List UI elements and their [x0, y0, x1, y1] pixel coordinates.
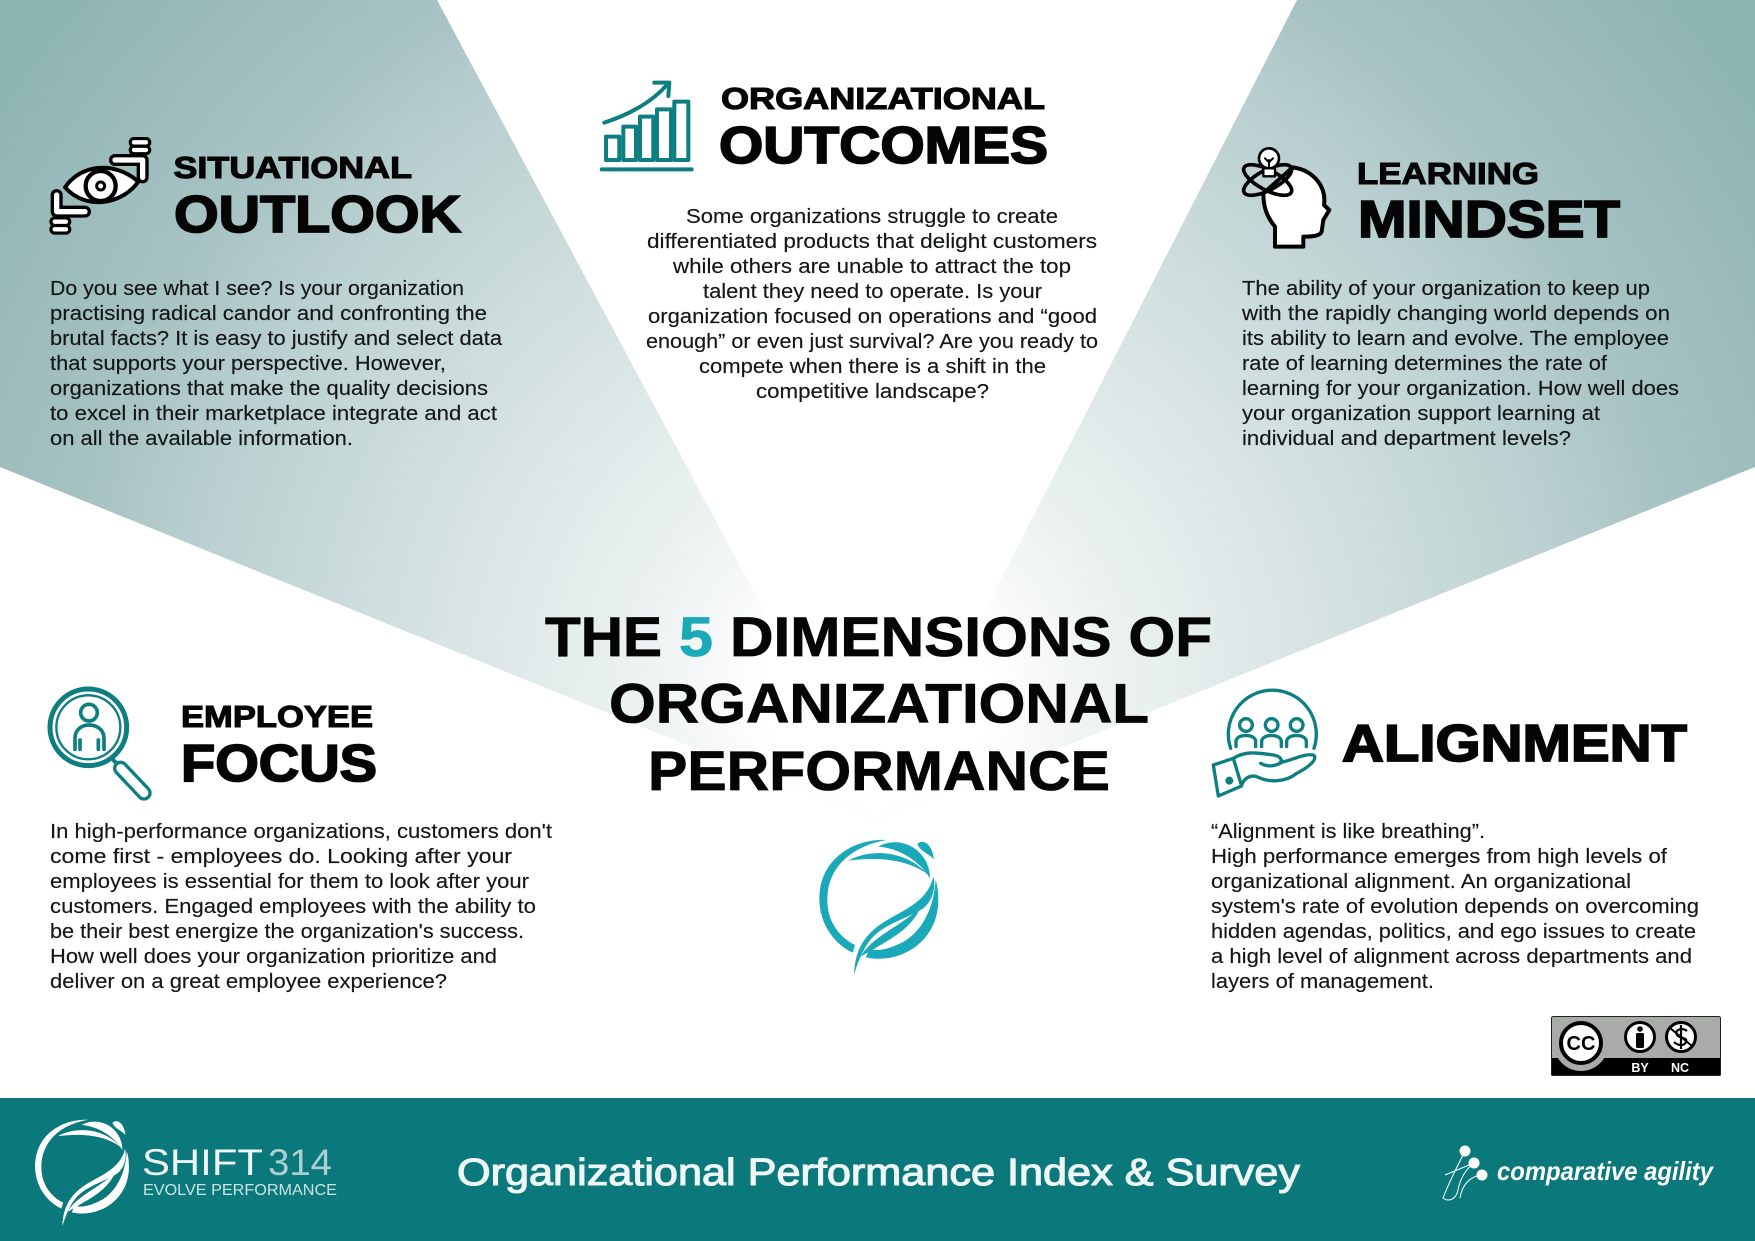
text block: employee focus [50, 820, 552, 993]
text block: employee focus: employees is essential for them to look after your [50, 870, 529, 893]
icon: creative commons by-nc badge: CC [1567, 1033, 1595, 1055]
text block: situational outlook: to excel in their marketplace integrate and act [50, 402, 497, 425]
text block: organizational outcomes [646, 205, 1098, 403]
title [545, 605, 1212, 802]
text block: organizational outcomes: talent they need to operate. Is your [703, 280, 1042, 303]
logo: comparative agility [1443, 1146, 1714, 1200]
panel: employee focus [50, 689, 552, 993]
icon: creative commons by-nc badge: BY [1631, 1061, 1649, 1075]
heading: employee focus [181, 699, 377, 793]
text block: situational outlook: that supports your perspective. However, [50, 352, 446, 375]
text block: learning mindset: its ability to learn and evolve. The employee [1242, 327, 1669, 350]
heading: organizational outcomes: OUTCOMES [719, 117, 1048, 175]
text block: alignment: “Alignment is like breathing”. [1211, 820, 1485, 843]
text: shift314 wordmark [142, 1142, 337, 1199]
title: PERFORMANCE [648, 739, 1110, 802]
panel: organizational outcomes [602, 81, 1098, 403]
icon: rising bar chart [602, 83, 692, 169]
icon: shift314 white logo [35, 1120, 129, 1226]
text block: learning mindset: individual and department levels? [1242, 427, 1571, 450]
text: shift314 wordmark: 314 [268, 1142, 332, 1183]
text block: alignment: organizational alignment. An organizational [1211, 870, 1631, 893]
text block: organizational outcomes: organization focused on operations and “good [648, 305, 1097, 328]
heading: situational outlook: OUTLOOK [174, 186, 461, 244]
text block: organizational outcomes: competitive landscape? [756, 380, 989, 403]
text block: alignment: layers of management. [1211, 970, 1434, 993]
text block: alignment: system's rate of evolution depends on overcoming [1211, 895, 1699, 918]
text block: organizational outcomes: Some organizations struggle to create [686, 205, 1058, 228]
text: shift314 wordmark: SHIFT [142, 1142, 263, 1183]
heading: organizational outcomes [719, 81, 1048, 175]
text block: situational outlook: brutal facts? It is easy to justify and select data [50, 327, 503, 350]
title: THE [545, 605, 662, 668]
panel: right fan background [877, 0, 1755, 822]
text block: alignment: High performance emerges from high levels of [1211, 845, 1667, 868]
text block: organizational outcomes: compete when there is a shift in the [699, 355, 1046, 378]
text block: learning mindset: your organization support learning at [1242, 402, 1600, 425]
text block: situational outlook: Do you see what I see? Is your organization [50, 277, 464, 300]
text block: employee focus: be their best energize the organization's success. [50, 920, 524, 943]
heading: alignment: ALIGNMENT [1342, 715, 1687, 773]
text block: alignment: hidden agendas, politics, and ego issues to create [1211, 920, 1696, 943]
panel: footer band [0, 1098, 1755, 1241]
icon: eye with viewfinder brackets [55, 142, 146, 229]
panel: situational outlook [50, 142, 503, 450]
footer title: Organizational Performance Index & Survey [457, 1152, 1300, 1194]
heading: learning mindset: LEARNING [1357, 156, 1539, 191]
text block: learning mindset: The ability of your organization to keep up [1242, 277, 1650, 300]
icon: head with atom and light bulb [1239, 148, 1329, 247]
text: shift314 wordmark: EVOLVE PERFORMANCE [143, 1182, 337, 1199]
icon: magnifier with person [50, 689, 144, 793]
panel: left fan background [0, 0, 877, 822]
panel: learning mindset [1239, 148, 1679, 450]
icon: hand holding people [1213, 690, 1316, 796]
text block: learning mindset: rate of learning determines the rate of [1242, 352, 1607, 375]
text block: learning mindset: with the rapidly changing world depends on [1241, 302, 1670, 325]
logo: comparative agility: comparative agility [1497, 1156, 1714, 1186]
text block: organizational outcomes: differentiated products that delight customers [647, 230, 1097, 253]
text block: employee focus: come first - employees do. Looking after your [50, 845, 512, 868]
text block: situational outlook: organizations that make the quality decisions [50, 377, 488, 400]
text block: employee focus: customers. Engaged employees with the ability to [50, 895, 536, 918]
icon: creative commons by-nc badge [1551, 1016, 1721, 1076]
text block: situational outlook [50, 277, 503, 450]
text block: alignment [1211, 820, 1699, 993]
text block: learning mindset [1241, 277, 1679, 450]
text block: employee focus: deliver on a great employee experience? [50, 970, 447, 993]
text block: situational outlook: on all the available information. [50, 427, 353, 450]
heading: employee focus: FOCUS [181, 735, 377, 793]
text block: learning mindset: learning for your organization. How well does [1242, 377, 1679, 400]
icon: shift314 teal logo [819, 840, 938, 975]
heading: employee focus: EMPLOYEE [181, 699, 373, 734]
text block: alignment: a high level of alignment across departments and [1211, 945, 1692, 968]
icon: creative commons by-nc badge: NC [1671, 1061, 1689, 1075]
heading: situational outlook [174, 150, 461, 244]
text block: employee focus: In high-performance organizations, customers don't [50, 820, 552, 843]
text block: organizational outcomes: while others are unable to attract the top [672, 255, 1071, 278]
heading: organizational outcomes: ORGANIZATIONAL [721, 81, 1045, 116]
title: DIMENSIONS OF [730, 605, 1212, 668]
text block: employee focus: How well does your organization prioritize and [50, 945, 497, 968]
heading: learning mindset [1357, 156, 1620, 249]
title: ORGANIZATIONAL [609, 672, 1149, 734]
heading: situational outlook: SITUATIONAL [174, 150, 412, 185]
panel: alignment [1211, 690, 1699, 993]
title: 5 [679, 605, 713, 668]
text block: organizational outcomes: enough” or even just survival? Are you ready to [646, 330, 1098, 353]
text block: situational outlook: practising radical candor and confronting the [50, 302, 487, 325]
heading: learning mindset: MINDSET [1358, 191, 1620, 249]
